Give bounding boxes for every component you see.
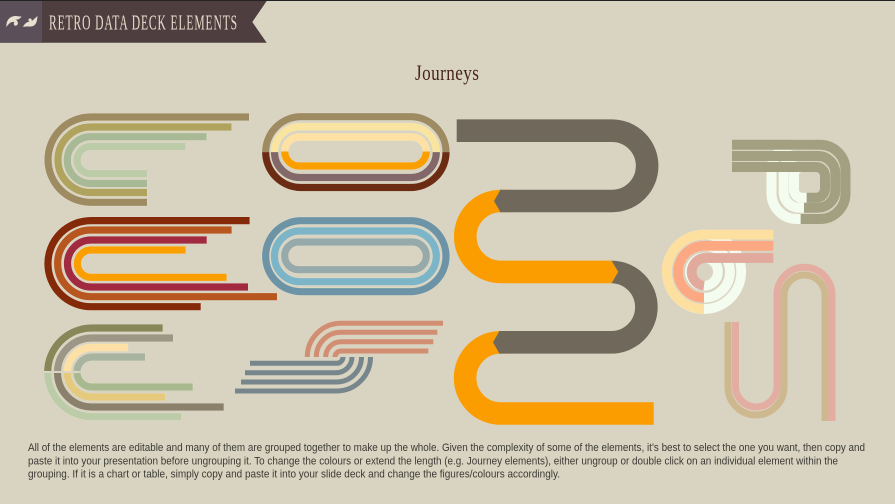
banner title: RETRO DATA DECK ELEMENTS (49, 11, 237, 34)
journey: sage squared spiral (732, 145, 846, 219)
body text: grouping. If it is a chart or table, simply copy and paste it into your slide deck and change the figures/colours accordingly. (28, 468, 560, 480)
icon: leaf ornaments (6, 16, 38, 27)
journey: khaki and green arcs (48, 117, 249, 202)
journey: red and orange arcs (48, 221, 277, 307)
journey: salmon and steel connector (235, 323, 443, 391)
journey: blue oval (266, 221, 446, 292)
journey: brown and orange oval (266, 117, 446, 188)
heading: Journeys (415, 61, 479, 86)
body text (28, 442, 865, 480)
header banner (0, 1, 267, 43)
journey: peach circular spiral (667, 235, 773, 309)
journey: split olive and green arcs (48, 328, 224, 417)
journey: large orange and grey serpentine (457, 131, 654, 413)
journey: pink and tan S-curve (728, 267, 832, 421)
